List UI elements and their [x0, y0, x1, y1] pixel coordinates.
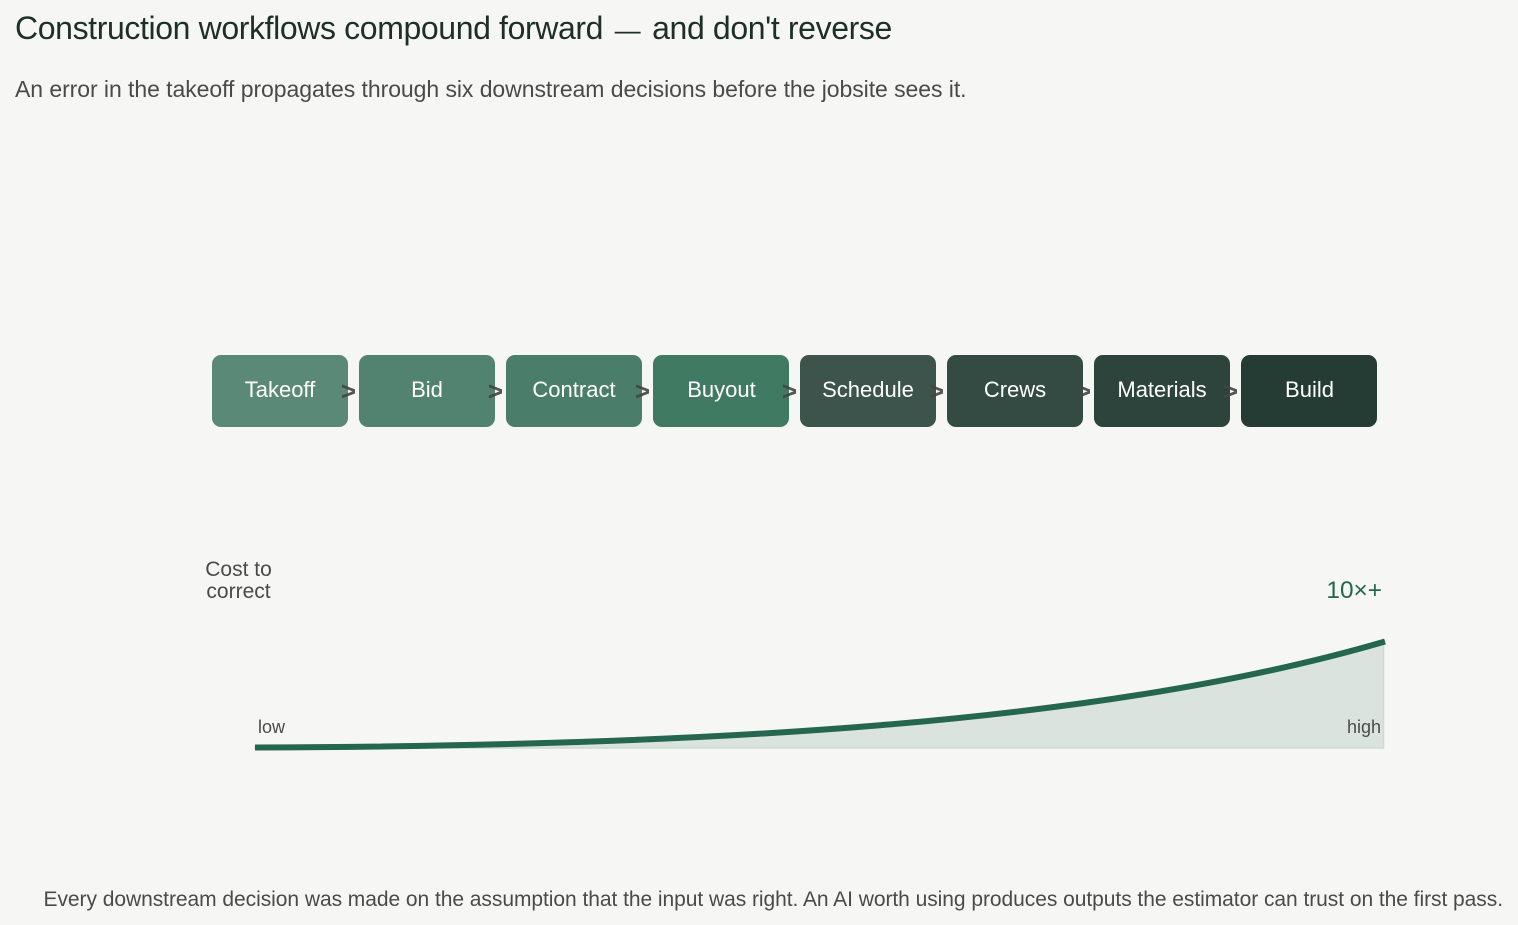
axis label: cost to correct	[205, 558, 272, 603]
workflow chain	[212, 355, 1377, 427]
axis label: cost to correct: correct	[206, 580, 271, 603]
step: Build: Build	[1285, 377, 1334, 402]
step: Build	[1241, 355, 1377, 427]
arrow: Materials to Build: >	[1223, 376, 1238, 406]
step: Bid	[359, 355, 495, 427]
arrow: Crews to Materials: >	[1076, 376, 1091, 406]
arrow: Takeoff to Bid: >	[341, 376, 356, 406]
subtitle: An error in the takeoff propagates through six downstream decisions before the jobsite sees it.	[15, 76, 966, 102]
step: Schedule	[800, 355, 936, 427]
title: Construction workflows compound forward — and don't reverse	[15, 10, 892, 46]
low label: low	[258, 717, 286, 737]
step: Crews: Crews	[984, 377, 1046, 402]
footer takeaway: Every downstream decision was made on the assumption that the input was right. An AI worth using produces outputs the estimator can trust on the first pass.	[44, 888, 1503, 911]
step: Crews	[947, 355, 1083, 427]
step: Materials: Materials	[1117, 377, 1207, 402]
step: Contract: Contract	[532, 377, 616, 402]
step: Schedule: Schedule	[822, 377, 914, 402]
arrow: Bid to Contract: >	[488, 376, 503, 406]
curve area fill	[255, 642, 1384, 748]
high label: high	[1347, 717, 1381, 737]
step: Takeoff	[212, 355, 348, 427]
arrow: Buyout to Schedule: >	[782, 376, 797, 406]
curve line	[255, 642, 1385, 748]
step: Takeoff: Takeoff	[245, 377, 315, 402]
arrow: Contract to Buyout: >	[635, 376, 650, 406]
step: Buyout: Buyout	[687, 377, 756, 402]
arrow: Schedule to Crews: >	[929, 376, 944, 406]
10x+ label: 10×+	[1326, 577, 1382, 604]
step: Buyout	[653, 355, 789, 427]
step: Contract	[506, 355, 642, 427]
step: Bid: Bid	[411, 377, 443, 402]
step: Materials	[1094, 355, 1230, 427]
axis label: cost to correct: Cost to	[205, 558, 272, 581]
